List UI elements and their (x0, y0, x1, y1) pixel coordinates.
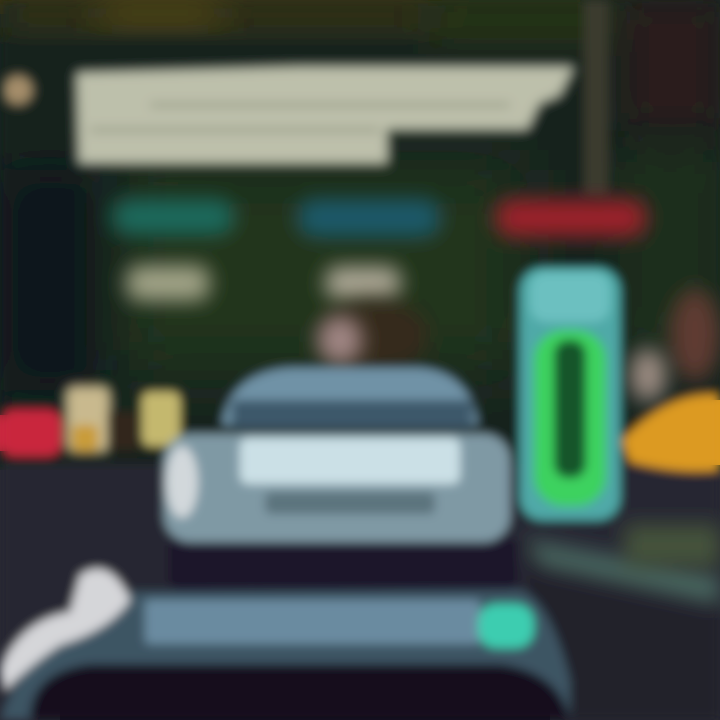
white wiper highlight (0, 569, 130, 690)
right scenery: person and orange shape (622, 289, 720, 471)
text block: middle value (326, 267, 400, 299)
pole (584, 0, 608, 195)
label: blue heading (298, 200, 440, 236)
car roof (222, 368, 478, 425)
road (0, 464, 720, 720)
person behind car (318, 299, 430, 371)
title (76, 66, 575, 164)
car grille (265, 492, 435, 514)
car (164, 368, 518, 591)
label: red heading (496, 200, 646, 236)
icon: battery (520, 268, 620, 520)
car hood (240, 438, 460, 484)
dashboard teal button (478, 604, 534, 648)
label: teal heading (112, 200, 234, 234)
icon: small lamp top left (3, 75, 33, 105)
car shadow (168, 535, 518, 591)
text block: left value (127, 266, 209, 300)
left traffic: red car and yellow signs (0, 386, 180, 456)
car body (164, 434, 510, 542)
car windshield (232, 400, 472, 428)
foreground dashboard (0, 569, 570, 720)
car headlight (166, 446, 198, 518)
